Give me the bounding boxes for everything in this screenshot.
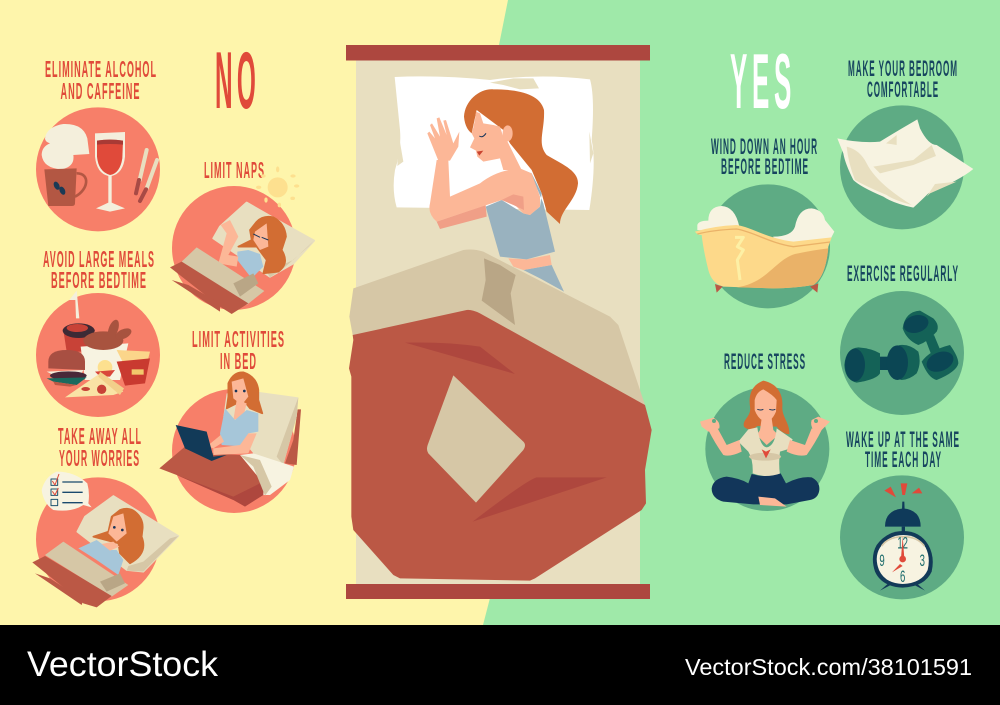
icon: alarm clock: 3	[920, 551, 925, 570]
icon: dumbbells	[840, 291, 964, 415]
mattress	[356, 60, 640, 585]
text: BEFORE BEDTIME	[721, 154, 809, 179]
heading	[711, 134, 818, 179]
heading: IN BED	[220, 348, 257, 374]
panel: limit naps: LIMIT NAPS	[204, 157, 265, 183]
background: green YES side	[483, 0, 1000, 625]
panel: avoid large meals	[36, 246, 160, 417]
footer bar: VectorStock	[27, 645, 219, 684]
panel: limit naps	[170, 157, 314, 314]
heading	[58, 423, 142, 471]
icon: meditating woman	[700, 381, 830, 511]
heading	[846, 427, 960, 472]
text: LIMIT ACTIVITIES	[192, 326, 285, 352]
panel: eliminate alcohol and caffeine	[36, 56, 160, 231]
text: WIND DOWN AN HOUR	[711, 134, 818, 159]
footer bar: VectorStock.com/38101591	[685, 654, 972, 680]
text: BEFORE BEDTIME	[51, 267, 147, 293]
panel: make your bedroom comfortable	[837, 56, 973, 229]
panel: take away all your worries: YOUR WORRIES	[59, 445, 140, 471]
text: NO	[215, 36, 260, 126]
text: ELIMINATE ALCOHOL	[45, 56, 157, 82]
heading	[43, 246, 155, 293]
panel: take away all your worries: TAKE AWAY ALL	[58, 423, 142, 449]
icon: pillow	[837, 105, 973, 229]
icon: woman with laptop in bed	[159, 372, 301, 513]
panel: wake up at the same time	[840, 427, 964, 599]
footer bar	[0, 625, 1000, 705]
text: YES	[730, 37, 796, 125]
pillow with woman	[394, 76, 594, 292]
icon: alarm clock: 6	[900, 567, 905, 586]
panel: take away all your worries	[32, 423, 178, 607]
panel: wind down before bedtime	[695, 134, 834, 308]
headboard bar	[346, 45, 650, 60]
icon: worried woman with checklist bubble	[32, 472, 178, 607]
icon: bathtub	[695, 184, 834, 308]
text: REDUCE STRESS	[724, 349, 806, 374]
heading	[848, 56, 958, 102]
heading	[45, 56, 157, 104]
blanket	[349, 249, 652, 581]
text: AVOID LARGE MEALS	[43, 246, 155, 272]
foot bar	[346, 584, 650, 599]
icon: fast food	[36, 291, 160, 417]
icon: alarm clock: 12	[897, 534, 908, 553]
panel: reduce stress	[700, 349, 830, 511]
text: AND CAFFEINE	[60, 78, 140, 104]
icon: alarm clock	[840, 475, 964, 599]
panel: limit activities in bed	[159, 326, 301, 513]
icon: alarm clock: 9	[879, 551, 885, 570]
icon: sun and napping woman	[170, 166, 314, 314]
panel: exercise regularly	[840, 261, 964, 415]
panel: bed with sleeping woman	[346, 45, 652, 599]
icon: coffee, wine, cigarettes	[36, 107, 160, 231]
heading	[192, 326, 285, 374]
background: yellow NO side	[0, 0, 510, 625]
